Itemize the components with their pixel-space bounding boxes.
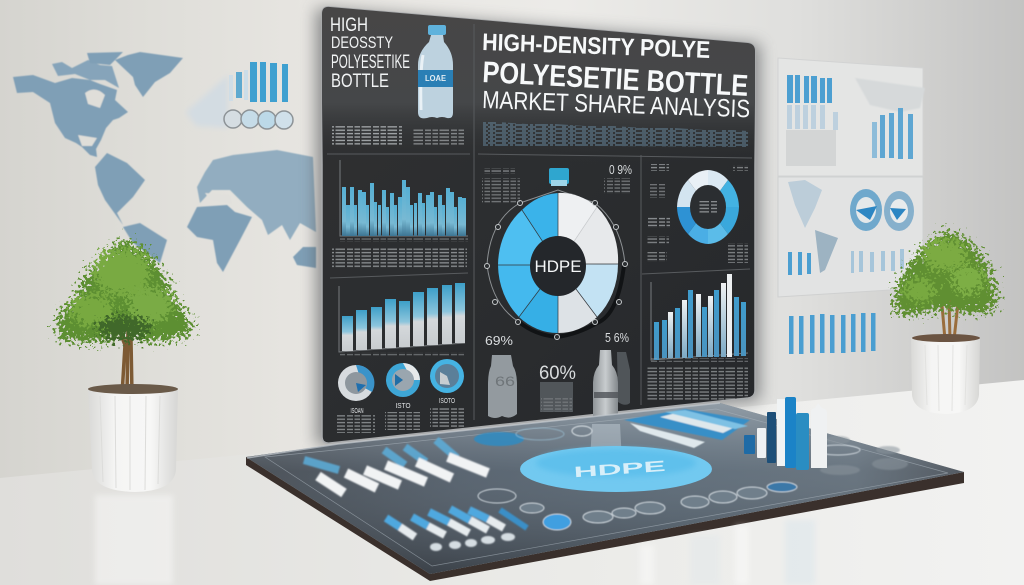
side title: POLYESETIKE [331, 52, 410, 73]
main dashboard screen [322, 0, 755, 443]
table circular icons [478, 445, 860, 530]
side title [330, 15, 410, 92]
title subtext band [483, 122, 748, 147]
tabletop display panel [246, 397, 964, 581]
percentage labels: 60% [539, 363, 576, 384]
HDPE donut chart [484, 168, 628, 340]
side description text [332, 126, 465, 145]
percentage labels: 0 9% [609, 162, 632, 177]
desk reflections [95, 495, 815, 585]
left plant [58, 240, 192, 492]
desk surface [0, 380, 1024, 585]
translucent bottles: 66 [495, 373, 515, 389]
3D bars on table [744, 397, 827, 470]
icon: water bottle: LOAE [425, 74, 447, 83]
wall chart: left mini bars and gauges [186, 62, 293, 129]
main title [482, 29, 751, 123]
table right corner details [820, 436, 908, 475]
icon: water bottle [418, 25, 453, 118]
translucent bottles [488, 350, 630, 426]
percentage labels [485, 162, 632, 384]
HDPE ellipse on table: HDPE [573, 458, 666, 481]
main title: POLYESETIE BOTTLE [482, 56, 749, 103]
main title: HIGH-DENSITY POLYE [482, 29, 711, 64]
donut labels and notes [337, 398, 465, 433]
glass bottle reflection on table [590, 424, 622, 462]
table top-left blue blob [474, 426, 592, 446]
donut labels and notes: ISOTO [439, 398, 455, 405]
right plant [895, 232, 998, 414]
side title: HIGH [330, 15, 368, 36]
side title: DEOSSTY [331, 33, 393, 52]
small donut charts [338, 359, 464, 401]
percentage labels: 69% [485, 333, 513, 348]
side title: BOTTLE [331, 71, 389, 92]
shadow behind main screen [316, 8, 760, 446]
HDPE donut chart: HDPE [534, 257, 582, 276]
table bar group: lower left [386, 509, 527, 551]
bar chart: growth [339, 283, 465, 357]
notes beside right donut [647, 164, 748, 263]
callout notes around donut [482, 168, 630, 204]
bar chart: regional share [647, 274, 748, 400]
HDPE ellipse on table [520, 446, 712, 492]
percentage labels: 5 6% [605, 330, 629, 345]
donut labels and notes: ISTO [396, 403, 411, 410]
world map on wall [13, 52, 316, 272]
bar chart: market data [332, 160, 468, 268]
donut labels and notes: ISOAN [350, 408, 364, 415]
main title: MARKET SHARE ANALYSIS [482, 86, 751, 123]
table bar group: upper left [304, 440, 488, 493]
wall panel: right charts [778, 58, 925, 354]
small donut chart right [677, 170, 739, 244]
table top-right stripe chart [624, 409, 750, 448]
